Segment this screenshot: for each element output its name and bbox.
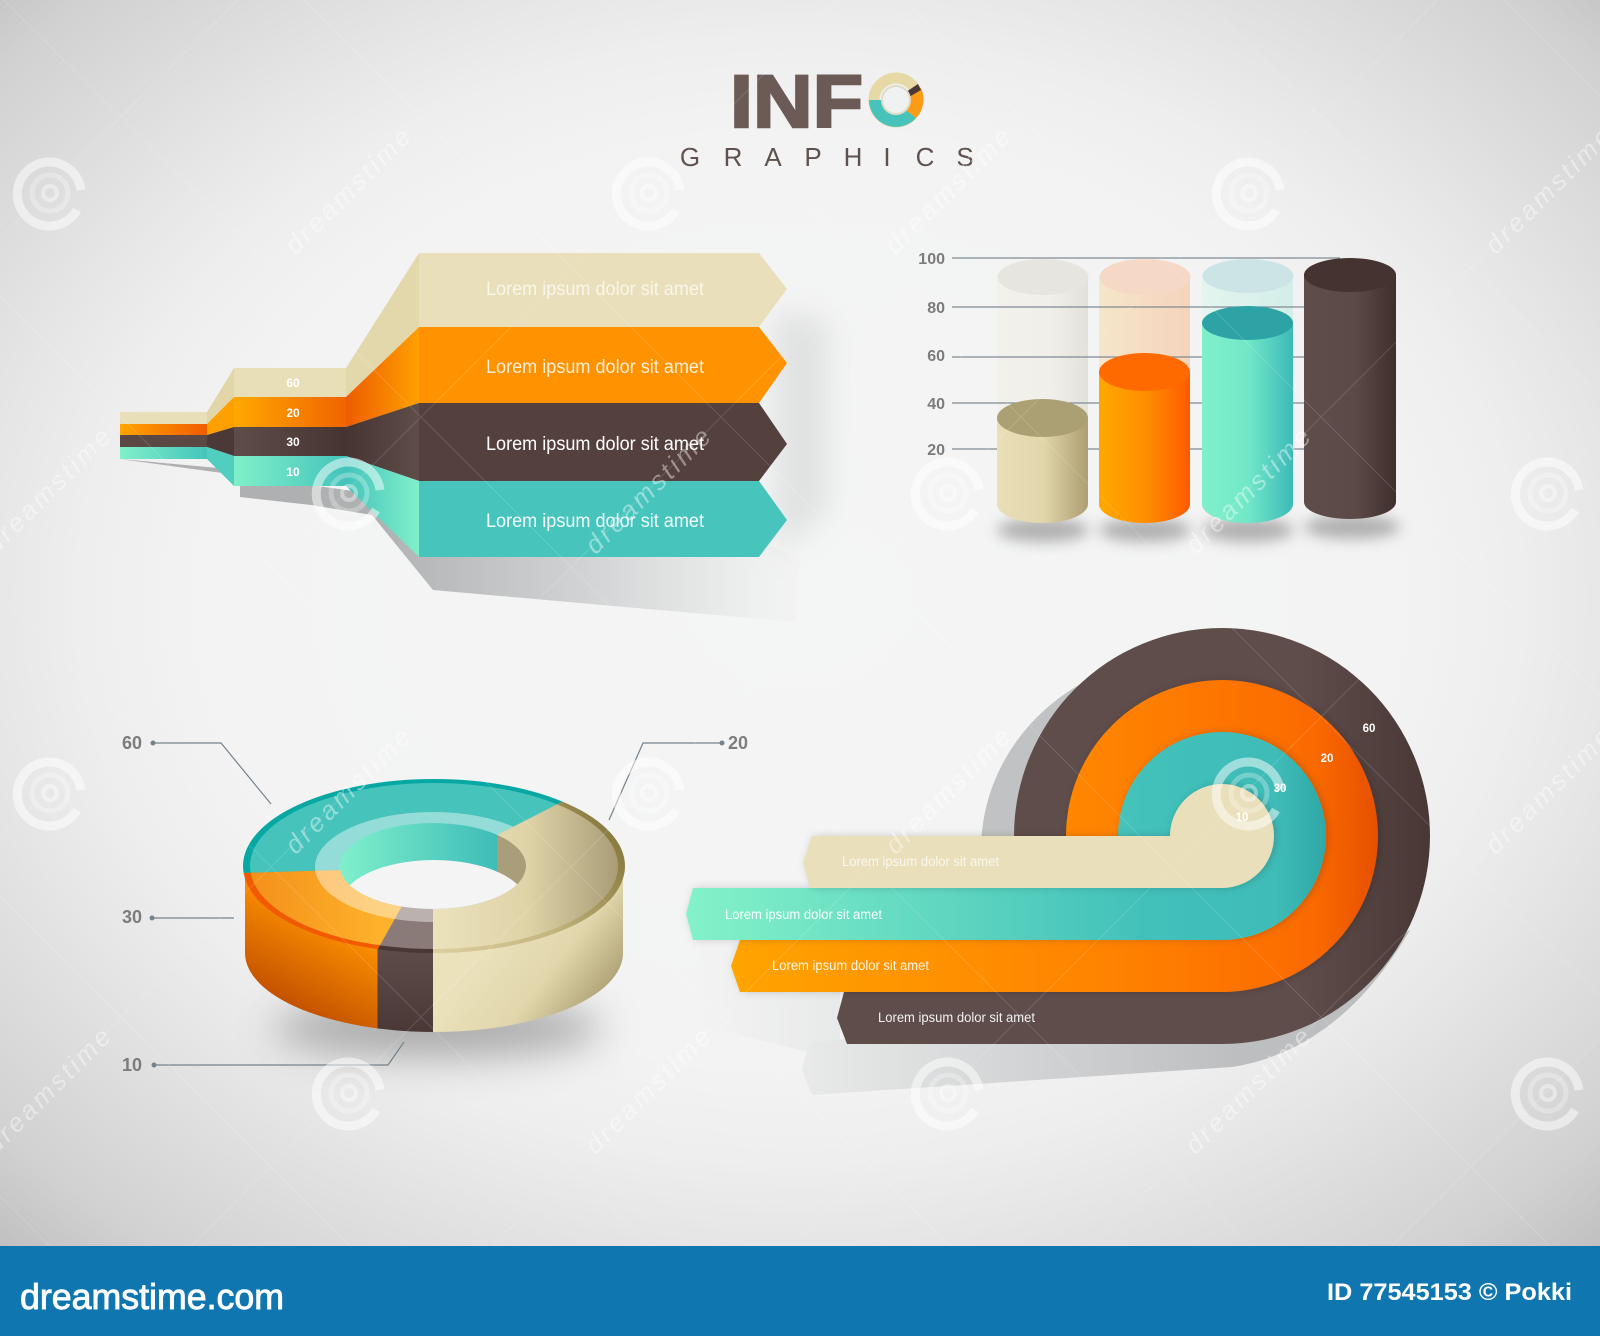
- title word GRAPHICS: GRAPHICS: [680, 142, 974, 172]
- spiral band: teal: [686, 732, 1326, 940]
- spiral band labels: Lorem ipsum dolor sit amet: [842, 854, 999, 869]
- footer bar: [0, 1246, 1600, 1336]
- cylinder: cream: [997, 399, 1088, 523]
- chart: cylinder bars: [918, 251, 1400, 542]
- funnel arrow labels: Lorem ipsum dolor sit amet: [486, 279, 705, 300]
- funnel arrow labels: Lorem ipsum dolor sit amet: [486, 357, 705, 378]
- leader: 30: [122, 907, 234, 927]
- spiral band labels: Lorem ipsum dolor sit amet: [772, 958, 929, 973]
- axis labels: 40: [927, 396, 945, 413]
- funnel values: 60: [286, 376, 300, 390]
- donut inner wall and hole: [340, 823, 526, 909]
- axis labels: 60: [927, 348, 945, 365]
- chart: 3D donut: [122, 733, 748, 1075]
- funnel right transition: [346, 253, 419, 557]
- chart: funnel arrows: [120, 253, 828, 622]
- donut light bevel ring: [315, 812, 514, 922]
- spiral shadow: [700, 655, 1410, 1095]
- arrow: brown: [419, 403, 787, 481]
- cylinder floor shadows: [997, 515, 1400, 542]
- spiral band labels: [725, 854, 1035, 1025]
- leader: 60: 60: [122, 733, 142, 753]
- ghost cylinders: [997, 259, 1294, 420]
- leader: 20: [609, 733, 748, 820]
- funnel left transition: [207, 368, 234, 486]
- watermark overlay: dreamstime: [579, 422, 717, 560]
- watermark overlay: dreamstime: [279, 122, 417, 260]
- chart: spiral bands: [686, 628, 1430, 1095]
- donut top face slices: [250, 783, 618, 949]
- watermark overlay: dreamstime: [579, 1022, 717, 1160]
- spiral band labels: Lorem ipsum dolor sit amet: [878, 1010, 1035, 1025]
- funnel values: 10: [286, 465, 300, 479]
- leader: 20: 20: [728, 733, 748, 753]
- donut floor shadow: [273, 998, 603, 1058]
- cylinder: teal: [1202, 306, 1293, 523]
- spiral band: brown: [837, 628, 1430, 1044]
- watermark overlay: dreamstime: [279, 722, 417, 860]
- spiral values: 60: [1363, 723, 1375, 735]
- funnel shadow: [120, 312, 828, 622]
- donut top rim: [243, 779, 625, 953]
- leader: 60: [122, 733, 271, 804]
- footer credit: ID 77545153 © Pokki: [1327, 1279, 1572, 1306]
- arrow: orange: [419, 327, 787, 403]
- funnel values: [286, 376, 300, 479]
- spiral band: orange: [731, 680, 1378, 992]
- spiral values: 30: [1274, 783, 1286, 795]
- funnel left stems: [120, 412, 207, 459]
- footer logo: dreamstime.com: [20, 1276, 284, 1317]
- spiral values: 10: [1236, 812, 1248, 824]
- watermark overlay: dreamstime: [1179, 422, 1317, 560]
- arrow: cream: [419, 253, 787, 327]
- funnel arrow labels: Lorem ipsum dolor sit amet: [486, 434, 705, 455]
- watermark overlay: dreamstime: [879, 122, 1017, 260]
- title: [680, 60, 974, 172]
- watermark overlay: dreamstime: [1179, 1022, 1317, 1160]
- cylinder: orange: [1099, 353, 1190, 523]
- axis labels: 80: [927, 300, 945, 317]
- leader: 30: 30: [122, 907, 142, 927]
- axis labels: [918, 251, 945, 459]
- donut outer wall: [243, 866, 625, 1036]
- funnel values: 20: [286, 406, 300, 420]
- spiral values: [1236, 723, 1375, 824]
- leader: 10: [122, 1042, 404, 1075]
- arrow: teal: [419, 481, 787, 557]
- axis labels: 20: [927, 442, 945, 459]
- watermark overlay: dreamstime: [879, 722, 1017, 860]
- spiral values: 20: [1321, 753, 1333, 765]
- axis grid lines: [952, 258, 1340, 449]
- funnel arrow labels: [486, 279, 705, 532]
- funnel values: 30: [286, 435, 300, 449]
- cylinder: brown: [1304, 258, 1396, 519]
- funnel arrow labels: Lorem ipsum dolor sit amet: [486, 511, 705, 532]
- spiral band labels: Lorem ipsum dolor sit amet: [725, 907, 882, 922]
- funnel middle band: [234, 368, 346, 486]
- axis labels: 100: [918, 251, 945, 268]
- leader: 10: 10: [122, 1055, 142, 1075]
- icon: title donut letter O: [869, 78, 923, 127]
- spiral band: cream: [803, 784, 1274, 888]
- title word INF: INF: [730, 60, 863, 143]
